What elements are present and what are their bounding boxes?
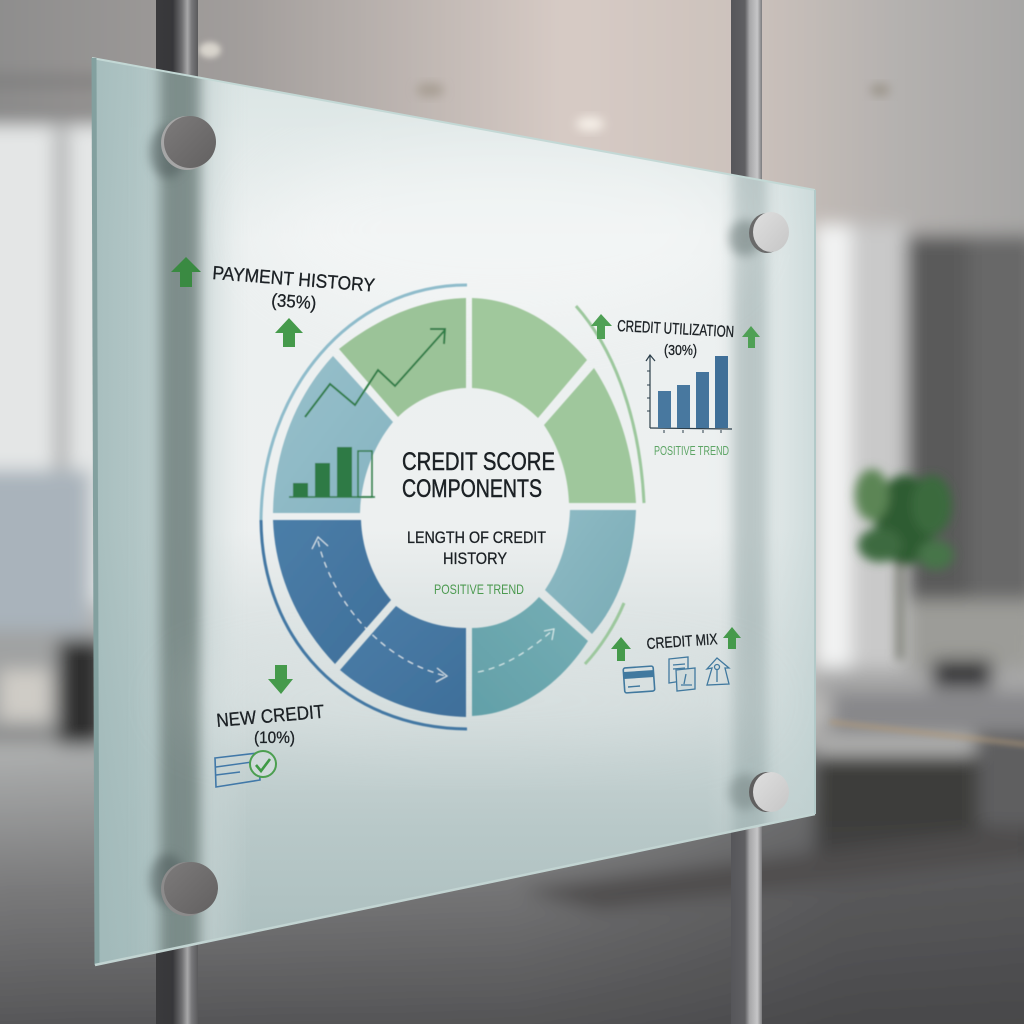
label: new credit: (10%): [254, 728, 295, 747]
trend label: utilization: POSITIVE TREND: [654, 443, 729, 458]
label: credit utilization: CREDIT UTILIZATION: [617, 318, 735, 341]
outer arc: bottom right green: [585, 603, 624, 664]
pole: left: [156, 0, 198, 1024]
icon: id card with check: [215, 751, 276, 787]
icon: arrow up, utilization right: [742, 326, 760, 348]
center title: COMPONENTS: [402, 475, 542, 503]
center trend label: POSITIVE TREND: [434, 581, 524, 597]
segment: right green: [544, 368, 636, 503]
standoff: bottom left: [150, 854, 218, 916]
segment: bottom blue: [340, 606, 466, 717]
label: payment history: PAYMENT HISTORY: [212, 263, 376, 297]
icon: arrow up, credit mix right: [723, 627, 741, 649]
center title: CREDIT SCORE: [402, 448, 555, 476]
segment: top left green: [339, 298, 466, 417]
center subtitle: HISTORY: [443, 549, 507, 568]
dashed flow arrow: left: [312, 537, 447, 682]
center title: [402, 448, 555, 503]
label: credit utilization: [617, 318, 735, 359]
line chart: rising trend: [305, 330, 445, 417]
bar chart: payment history: [289, 447, 375, 497]
center subtitle: LENGTH OF CREDIT: [407, 528, 546, 547]
icon: arrow up, payment history: [275, 318, 303, 347]
segment: right teal: [545, 510, 636, 634]
plant blur: [855, 469, 954, 660]
icon: credit card: [623, 666, 655, 693]
outer arc: left side teal: [261, 285, 467, 520]
dashed flow arrow: right: [478, 629, 554, 672]
label: payment history: [212, 263, 376, 313]
icon: arrow up, payment history left: [171, 257, 201, 287]
outer arc: right green: [576, 306, 644, 503]
panel: frosted glass: [92, 40, 815, 980]
bar chart: credit utilization: [646, 355, 732, 433]
standoff: bottom right: [729, 772, 789, 812]
label: payment history: (35%): [271, 290, 317, 313]
segment: bottom right teal: [472, 597, 588, 716]
segment: upper left teal: [273, 356, 393, 513]
segment: left blue: [273, 520, 391, 664]
center subtitle: [407, 528, 546, 568]
icon: documents: [669, 657, 695, 691]
arrow head: rising trend: [430, 329, 445, 344]
label: new credit: [216, 702, 325, 747]
label: credit utilization: (30%): [664, 342, 697, 359]
icon: arrow up, utilization left: [591, 314, 612, 339]
icon: house: [707, 658, 729, 685]
label: credit mix: CREDIT MIX: [646, 631, 719, 653]
standoff: top right: [729, 212, 789, 256]
icon: arrow up, credit mix left: [611, 637, 631, 661]
pole: right: [731, 0, 762, 1024]
icon: arrow down, new credit: [268, 665, 293, 694]
label: new credit: NEW CREDIT: [216, 702, 325, 732]
standoff: top left: [150, 116, 216, 178]
segment: top right green: [472, 298, 587, 418]
donut chart: credit score components: [261, 285, 644, 729]
outer arc: bottom left blue: [261, 520, 467, 729]
